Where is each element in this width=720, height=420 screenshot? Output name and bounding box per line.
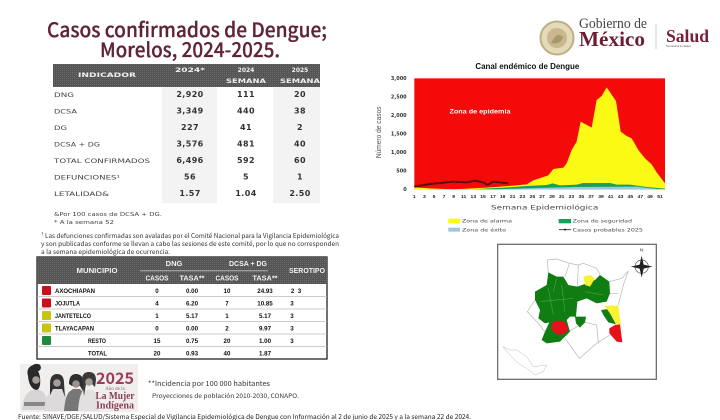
- legend: Zona de alarma: [462, 219, 512, 225]
- x axis labels: 19: [500, 194, 506, 200]
- safety zone: [470, 183, 665, 189]
- text block: incidence note: Proyecciones de población 2010-2030, CONAPO.: [152, 391, 299, 400]
- values 2024: 3,576: [176, 140, 204, 148]
- table header: 2024*: [175, 67, 206, 74]
- row: Jantetelco: 5.17: [259, 313, 272, 320]
- logo: Gobierno de México, Salud: Secretaría de Salud: [666, 44, 691, 48]
- legend: Casos probables 2025: [573, 227, 643, 233]
- row: Tlayacapan: 0.00: [186, 326, 199, 332]
- x axis labels: 9: [452, 194, 455, 200]
- row labels: [53, 92, 150, 198]
- map frame: [498, 244, 656, 379]
- row: Axochiapan: 24.93: [257, 288, 273, 295]
- row: Jantetelco: 5.17: [186, 313, 199, 320]
- row: Total: 20: [154, 350, 161, 358]
- row dividers: [37, 296, 327, 346]
- x axis labels: 17: [490, 194, 496, 200]
- y axis labels: 2,000: [391, 113, 407, 119]
- row: Jojutla: 10.85: [257, 300, 273, 308]
- table header: 2024: [238, 67, 254, 74]
- text block: incidence note: [148, 379, 299, 400]
- banner: 2025 Año de la Mujer Indígena: [20, 364, 138, 412]
- row labels: LETALIDAD&: [54, 191, 109, 198]
- table header: DCSA + DG: [229, 259, 267, 268]
- row: Resto: 3: [290, 338, 294, 345]
- x axis labels: 1: [413, 194, 416, 200]
- row: Total: 40: [224, 350, 231, 358]
- row labels: DCSA: [54, 108, 78, 116]
- row: Tlayacapan: TLAYACAPAN: [55, 326, 94, 332]
- x axis labels: 15: [480, 194, 486, 200]
- values 2024 semana: 1.04: [235, 189, 257, 198]
- table header: CASOS: [146, 274, 168, 282]
- y axis title: Número de casos: [376, 106, 383, 158]
- values 2024 semana: 440: [237, 106, 255, 116]
- row labels: TOTAL CONFIRMADOS: [53, 158, 150, 165]
- legend: [448, 219, 643, 233]
- footnotes: [54, 212, 162, 226]
- icon: compass: [631, 247, 653, 278]
- x axis labels: 5: [433, 194, 436, 200]
- text block: incidence note: **Incidencia por 100 000 habitantes: [148, 379, 271, 389]
- alarm zone: [414, 87, 665, 189]
- banner: 2025 Año de la Mujer Indígena: Año de la: [105, 387, 125, 392]
- values 2024: 1.57: [179, 189, 201, 198]
- table header: [53, 64, 320, 87]
- row: Resto: [42, 336, 294, 345]
- x axis labels: 7: [443, 194, 446, 200]
- row: Tlayacapan: 9.97: [259, 326, 272, 332]
- values 2025 semana: 1: [297, 172, 303, 182]
- table header: SEROTIPO: [289, 266, 325, 275]
- row: Jantetelco: JANTETELCO: [55, 313, 91, 320]
- values 2024 semana: 41: [240, 123, 252, 132]
- yellow municipalities: [583, 275, 595, 287]
- row: Total: 1.87: [259, 350, 272, 358]
- row: Tlayacapan: 2: [225, 326, 229, 332]
- values 2024 semana: 592: [237, 156, 255, 165]
- banner: 2025 Año de la Mujer Indígena: Indígena: [96, 400, 134, 412]
- table header: MUNICIPIO: [76, 266, 118, 275]
- x axis labels: 47: [638, 194, 643, 200]
- epidemic zone: [414, 78, 665, 189]
- chart: endemic channel: [376, 61, 665, 233]
- text block: deaths note: y son publicadas conforme se llevan a cabo las sesiones de este comité, por lo que no corresponden: [41, 238, 339, 248]
- uncolored municipalities outline: [527, 259, 628, 358]
- icon: national emblem: [540, 22, 574, 54]
- values 2024: 227: [181, 123, 199, 132]
- table header: INDICADOR: [78, 72, 137, 79]
- values 2024: 2,920: [176, 90, 204, 99]
- row: Jantetelco: 1: [155, 313, 159, 320]
- row: Axochiapan: [42, 286, 302, 295]
- row: Jantetelco: 3: [290, 313, 294, 320]
- panel: municipality table: [37, 257, 327, 359]
- row: Jojutla: 6.20: [186, 300, 199, 308]
- table header: [37, 257, 327, 284]
- values 2024 semana: 481: [237, 140, 255, 148]
- row: Jantetelco: [42, 311, 294, 320]
- shaded columns: [162, 87, 320, 203]
- row: Jojutla: JOJUTLA: [55, 300, 80, 308]
- line: probable cases 2025: [414, 181, 508, 187]
- x axis labels: 43: [618, 194, 624, 200]
- row: Resto: 20: [224, 338, 231, 345]
- values 2025 semana: [289, 90, 311, 198]
- title: [47, 14, 327, 63]
- text block: deaths note: a la semana epidemiológica de ocurrencia.: [41, 246, 170, 256]
- row labels: DG: [54, 125, 67, 132]
- values 2024: [176, 90, 204, 198]
- row: Axochiapan: 10: [224, 288, 231, 295]
- values 2024 semana: 5: [243, 172, 249, 182]
- table header: TASA**: [252, 274, 278, 282]
- logo: Gobierno de México, Salud: Gobierno de: [579, 16, 647, 32]
- logo: Gobierno de México, Salud: México: [579, 27, 645, 51]
- x axis labels: 29: [549, 194, 555, 200]
- x axis labels: [413, 194, 663, 200]
- row: Total: TOTAL: [88, 350, 107, 358]
- table header: SEMANA: [226, 78, 266, 85]
- footnotes: * A la semana 52: [54, 220, 114, 226]
- row labels: DEFUNCIONES¹: [54, 174, 121, 182]
- row: Jojutla: 7: [225, 300, 229, 308]
- values 2024: 6,496: [176, 156, 204, 165]
- green municipal boundaries: [540, 278, 603, 315]
- row: Jojutla: [42, 298, 294, 308]
- banner: 2025 Año de la Mujer Indígena: La Mujer: [96, 391, 135, 402]
- values 2024 semana: [235, 90, 257, 198]
- chart title: Canal endémico de Dengue: [475, 61, 580, 71]
- values 2025 semana: 38: [294, 106, 306, 116]
- x axis labels: 13: [471, 194, 476, 200]
- banner: 2025 Año de la Mujer Indígena: 2025: [96, 365, 134, 389]
- x axis labels: 45: [628, 194, 633, 200]
- title: Morelos, 2024-2025.: [100, 34, 280, 63]
- text block: deaths note: [41, 230, 339, 256]
- inset map of Mexico: [503, 347, 547, 375]
- icon: women figures: [22, 364, 99, 411]
- y axis labels: 1,500: [391, 131, 407, 137]
- red municipalities: [551, 321, 568, 334]
- row: Axochiapan: AXOCHIAPAN: [55, 288, 95, 295]
- x axis labels: 51: [657, 194, 663, 200]
- row: Jojutla: 3: [290, 300, 294, 308]
- footnotes: &Por 100 casos de DCSA + DG.: [54, 212, 162, 218]
- row: Total: [88, 350, 272, 358]
- values 2024: 3,349: [176, 106, 204, 116]
- row: Resto: 15: [154, 338, 161, 345]
- row: Total: 0.93: [186, 350, 199, 358]
- text block: deaths note: ¹ Las defunciones confirmadas son avaladas por el Comité Nacional para la Vigilancia Epidemiológica: [41, 230, 339, 240]
- values 2025 semana: 60: [294, 156, 306, 165]
- x axis labels: 11: [461, 194, 467, 200]
- x axis labels: 35: [579, 194, 584, 200]
- x axis title: Semana Epidemiológica: [491, 204, 599, 211]
- legend: Zona de seguridad: [573, 219, 632, 225]
- x axis labels: 3: [423, 194, 426, 200]
- values 2025 semana: 40: [294, 140, 306, 148]
- y axis labels: 500: [396, 168, 407, 174]
- row: Resto: RESTO: [88, 338, 106, 345]
- values 2024 semana: 111: [237, 90, 255, 99]
- success zone: [497, 187, 665, 189]
- y axis labels: 1,000: [391, 150, 407, 156]
- x axis labels: 37: [588, 194, 594, 200]
- row: Resto: 1.00: [259, 338, 272, 345]
- values 2024: 56: [184, 172, 196, 182]
- table header: SEMANA: [280, 78, 320, 85]
- y axis labels: 2,500: [391, 94, 407, 100]
- map: Morelos municipalities: [498, 244, 656, 379]
- table header: TASA**: [180, 274, 205, 282]
- row labels: DNG: [54, 92, 74, 99]
- x axis labels: 21: [510, 194, 516, 200]
- row: Jojutla: 4: [155, 300, 159, 308]
- x axis labels: 25: [530, 194, 535, 200]
- values 2025 semana: 20: [294, 90, 306, 99]
- x axis labels: 23: [520, 194, 525, 200]
- row: Tlayacapan: [42, 324, 294, 332]
- row labels: DCSA + DG: [54, 142, 100, 148]
- x axis labels: 27: [539, 194, 545, 200]
- row: Jantetelco: 1: [225, 313, 229, 320]
- table header: DNG: [166, 259, 182, 268]
- row: Axochiapan: 2 3: [291, 288, 302, 295]
- x axis labels: 31: [559, 194, 565, 200]
- logo: Gobierno de México, Salud: Salud: [666, 26, 709, 46]
- epidemic label: Zona de epidemia: [449, 109, 511, 116]
- row: Tlayacapan: 3: [290, 326, 294, 332]
- y axis labels: 3,000: [391, 76, 407, 82]
- values 2025 semana: 2.50: [289, 189, 311, 198]
- table header: CASOS: [216, 274, 238, 282]
- logo: Gobierno de México, Salud: [540, 16, 709, 54]
- row: Axochiapan: 0: [155, 288, 159, 295]
- row: Axochiapan: 0.00: [186, 288, 199, 295]
- values 2025 semana: 2: [297, 123, 303, 132]
- green municipalities: [535, 272, 610, 343]
- x axis labels: 41: [608, 194, 614, 200]
- row: Tlayacapan: 0: [155, 326, 159, 332]
- x axis labels: 39: [598, 194, 604, 200]
- x axis labels: 33: [569, 194, 574, 200]
- icon: compass: N: [640, 247, 644, 253]
- y axis labels: 0: [403, 187, 407, 193]
- y axis labels: [391, 76, 407, 193]
- x axis labels: 49: [647, 194, 653, 200]
- title: Casos confirmados de Dengue;: [47, 14, 327, 43]
- table header: 2025: [292, 67, 308, 74]
- legend: Zona de éxito: [462, 226, 506, 233]
- row: Resto: 0.75: [186, 338, 199, 345]
- panel: indicator table: [53, 64, 320, 203]
